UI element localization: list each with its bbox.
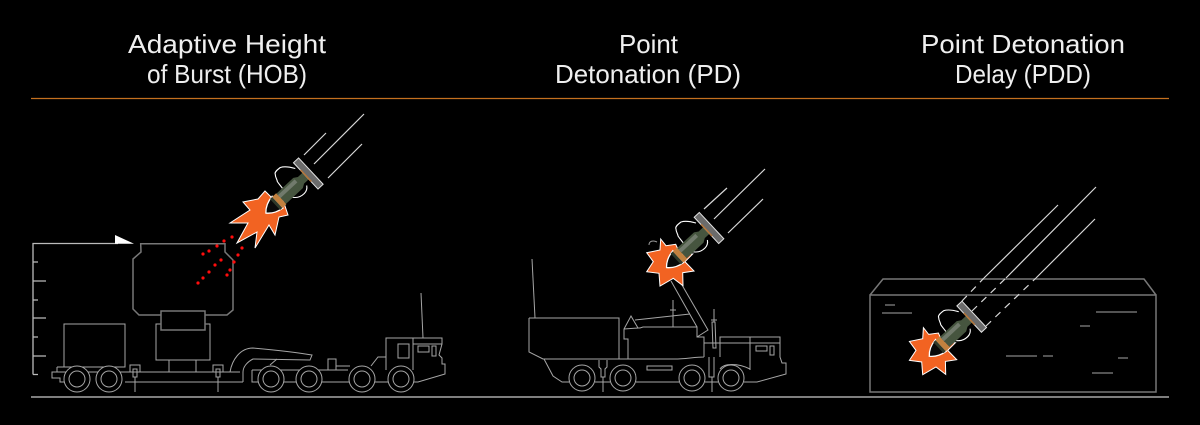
radar unit [133, 244, 233, 372]
burst: point detonation [647, 239, 694, 286]
burst: delayed detonation [909, 328, 957, 375]
truck: launcher [529, 259, 786, 392]
title: Point Detonation Delay: Point Detonation [921, 29, 1125, 59]
bomb 3 [917, 301, 987, 369]
title: Adaptive Height of Burst: Adaptive Height [128, 29, 327, 59]
title: Adaptive Height of Burst: of Burst (HOB) [147, 59, 307, 89]
bomb 1 [254, 158, 323, 226]
title: Point Detonation [555, 29, 741, 89]
height axis with flag [33, 235, 134, 374]
burst: airburst [230, 191, 288, 248]
truck: radar carrier [52, 293, 445, 392]
motion trails: bomb 3 [962, 187, 1096, 326]
title: Point Detonation Delay [921, 29, 1125, 89]
red fragment dots [196, 235, 244, 285]
title: Point Detonation: Detonation (PD) [555, 59, 741, 89]
title: Point Detonation: Point [619, 29, 679, 59]
motion trails: bomb 1 [304, 114, 364, 178]
title: Point Detonation Delay: Delay (PDD) [955, 59, 1091, 89]
bomb 2 [654, 212, 724, 281]
title: Adaptive Height of Burst [128, 29, 327, 89]
motion trails: bomb 2 [704, 169, 765, 233]
target box [870, 279, 1156, 392]
